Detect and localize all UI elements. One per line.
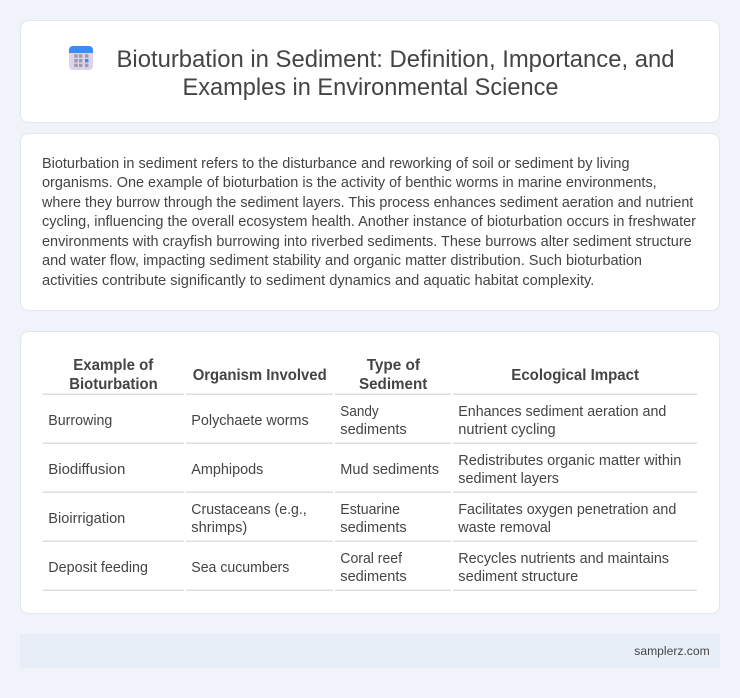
table row: deposit feeding: Coral reef <box>340 551 403 567</box>
table rules <box>43 394 697 591</box>
title <box>116 46 674 101</box>
table row: biodiffusion: sediment layers <box>458 471 559 487</box>
table row: bioirrigation: Facilitates oxygen penetration and <box>458 502 676 518</box>
icon: calendar <box>69 46 93 70</box>
table row: biodiffusion: Redistributes organic matter within <box>458 453 681 469</box>
footer: samplerz.com <box>634 644 710 658</box>
text block: description paragraph: activities contribute significantly to sediment dynamics and aquatic habitat complexity. <box>42 273 594 289</box>
table header row <box>69 357 639 393</box>
table row: burrowing: sediments <box>340 422 407 438</box>
table row: deposit feeding: Recycles nutrients and maintains <box>458 551 669 567</box>
table row: deposit feeding: Sea cucumbers <box>191 560 289 576</box>
table row: bioirrigation: waste removal <box>457 520 551 536</box>
table row: burrowing: nutrient cycling <box>458 422 556 438</box>
table row: deposit feeding: sediments <box>340 569 407 585</box>
table row: deposit feeding: sediment structure <box>458 569 578 585</box>
text block: description paragraph: Bioturbation in sediment refers to the disturbance and reworking of soil or sediment by living <box>42 156 630 172</box>
panel: description <box>20 134 720 310</box>
table row: burrowing: Sandy <box>340 404 379 420</box>
text block: description paragraph: and water flow, impacting sediment stability and organic matter distribution. Such bioturbation <box>42 253 642 269</box>
table row: deposit feeding <box>48 551 669 585</box>
text block: description paragraph: environments with crayfish burrowing into riverbed sediments. These burrows alter sediment structure <box>42 234 692 250</box>
table header row: Ecological Impact <box>511 367 639 384</box>
table row: bioirrigation <box>48 502 676 536</box>
table row: bioirrigation: Estuarine <box>340 502 400 518</box>
table header row: Organism Involved <box>193 367 327 384</box>
table row: deposit feeding: Deposit feeding <box>48 560 148 576</box>
table row: bioirrigation: shrimps) <box>191 520 247 536</box>
text block: description paragraph: organisms. One example of bioturbation is the activity of benthic worms in marine environments, <box>42 175 657 191</box>
text block: description paragraph: where they burrow through the sediment layers. This process enhances sediment aeration and nutrient <box>41 195 693 211</box>
panel: title header <box>20 20 720 122</box>
text block: description paragraph: cycling, influencing the overall ecosystem health. Another instance of bioturbation occurs in freshwater <box>42 214 696 230</box>
panel: table <box>20 332 720 614</box>
table header row: Bioturbation <box>69 376 158 393</box>
table row: bioirrigation: sediments <box>340 520 407 536</box>
table row: biodiffusion <box>48 453 681 487</box>
text block: description paragraph <box>41 156 696 289</box>
table row: bioirrigation: Crustaceans (e.g., <box>191 502 307 518</box>
table row: bioirrigation: Bioirrigation <box>48 511 125 527</box>
table row: burrowing <box>48 404 666 438</box>
table header row: Sediment <box>359 376 427 393</box>
title: Examples in Environmental Science <box>182 74 558 101</box>
table row: burrowing: Burrowing <box>48 413 112 429</box>
table row: biodiffusion: Biodiffusion <box>48 462 125 478</box>
table header row: Type of <box>367 357 421 374</box>
table row: biodiffusion: Mud sediments <box>340 462 439 478</box>
table row: burrowing: Polychaete worms <box>191 413 309 429</box>
footer <box>20 634 720 668</box>
table row: biodiffusion: Amphipods <box>191 462 263 478</box>
table header row: Example of <box>73 357 154 374</box>
title: Bioturbation in Sediment: Definition, Importance, and <box>116 46 674 73</box>
table row: burrowing: Enhances sediment aeration and <box>458 404 666 420</box>
